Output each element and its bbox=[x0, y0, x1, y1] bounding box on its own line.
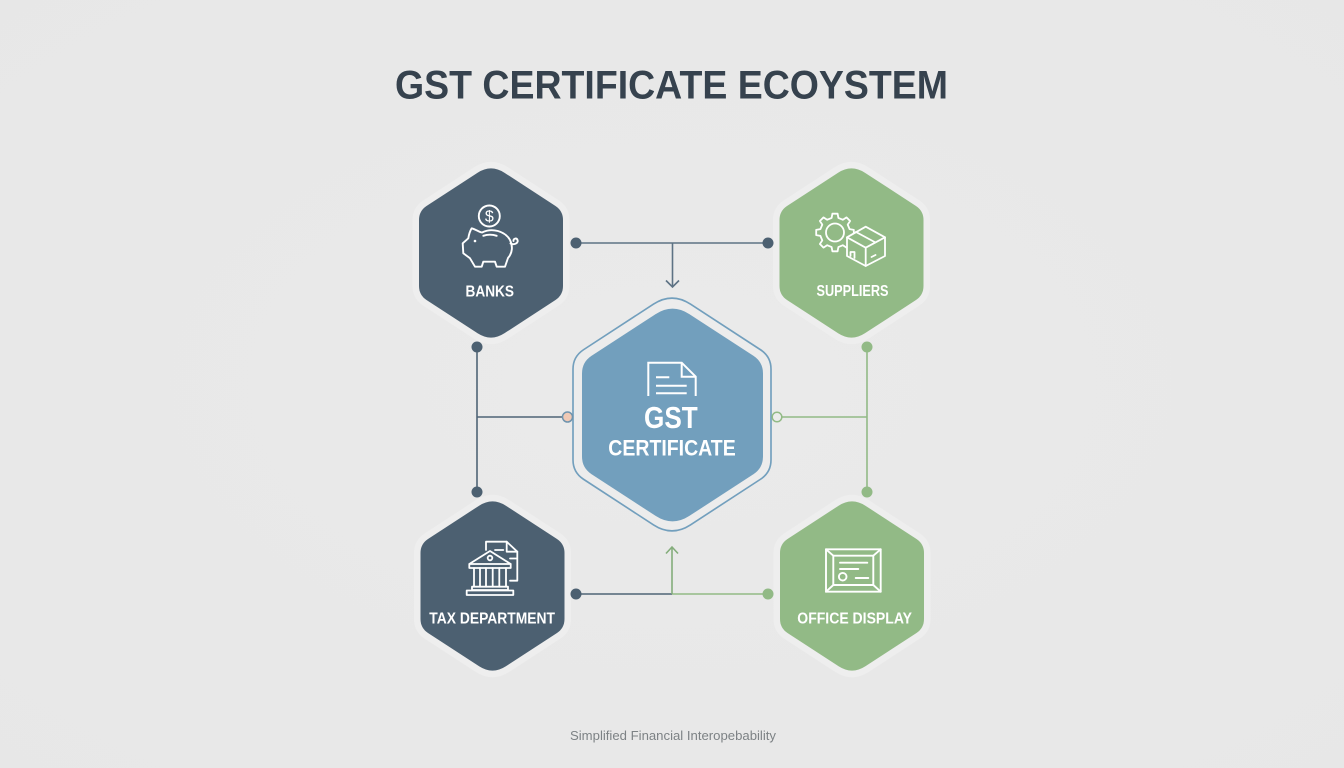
icon: piggy bank with coin: $ bbox=[485, 208, 494, 226]
title: GST CERTIFICATE ECOYSTEM bbox=[395, 64, 948, 108]
panel: tax department bbox=[420, 501, 564, 671]
footer tagline: Simplified Financial Interopebability bbox=[570, 728, 776, 743]
panel: office display bbox=[780, 501, 924, 671]
panel: banks bbox=[419, 168, 563, 338]
icon: gear and box bbox=[816, 214, 885, 266]
panel: GST certificate centre bbox=[573, 298, 771, 531]
label: certificate: CERTIFICATE bbox=[608, 436, 736, 460]
connector: banks to suppliers with arrow to centre bbox=[570, 238, 774, 287]
icon: piggy bank with coin bbox=[463, 206, 518, 267]
connector: suppliers and office display to centre bbox=[772, 342, 872, 498]
connector: banks and tax department to centre bbox=[472, 342, 572, 498]
label: office display: OFFICE DISPLAY bbox=[797, 610, 912, 628]
label: banks: BANKS bbox=[466, 284, 514, 300]
panel: suppliers bbox=[780, 168, 924, 338]
connector: tax department and office display with arrow to centre bbox=[570, 547, 774, 600]
label: tax department: TAX DEPARTMENT bbox=[429, 610, 555, 628]
icon: government building and document bbox=[467, 542, 517, 595]
label: suppliers: SUPPLIERS bbox=[816, 283, 889, 300]
icon: framed certificate bbox=[826, 549, 881, 592]
icon: document bbox=[648, 363, 696, 396]
label: GST: GST bbox=[644, 400, 698, 435]
